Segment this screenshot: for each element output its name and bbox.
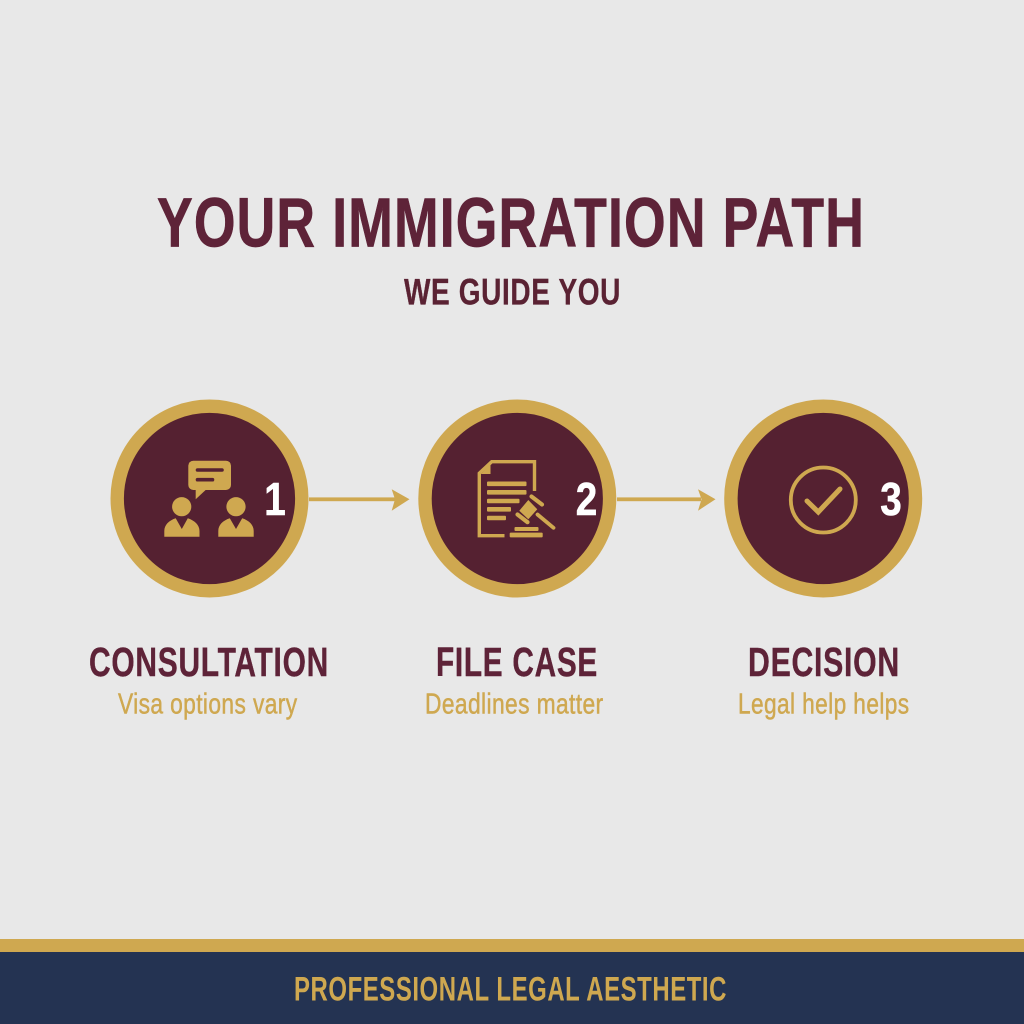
badge circle: step 3 <box>731 406 916 591</box>
heading: decision: DECISION <box>748 639 900 685</box>
step 1 label <box>89 639 329 720</box>
icon: document and gavel <box>479 462 554 537</box>
step 2 label <box>425 639 604 720</box>
arrow: step 1 to step 2 <box>309 489 410 511</box>
number 1: 1 <box>264 474 286 525</box>
caption: deadlines matter: Deadlines matter <box>425 688 604 720</box>
step 3 label <box>738 639 910 720</box>
number 2: 2 <box>576 474 597 525</box>
badge circle: step 1 <box>117 406 302 591</box>
number 3: 3 <box>880 474 902 525</box>
step 3 badge <box>731 406 916 591</box>
badge circle: step 2 <box>425 406 610 591</box>
subtitle: WE GUIDE YOU <box>404 271 621 312</box>
icon: check mark in circle <box>791 468 856 532</box>
step 1 badge <box>117 406 302 591</box>
heading: consultation: CONSULTATION <box>89 639 329 685</box>
icon: two people in conversation <box>164 461 254 537</box>
footer text: PROFESSIONAL LEGAL AESTHETIC <box>294 971 727 1009</box>
footer banner <box>0 939 1024 1024</box>
step 2 badge <box>425 406 610 591</box>
caption: legal help helps: Legal help helps <box>738 688 910 720</box>
caption: visa options vary: Visa options vary <box>118 688 298 720</box>
heading: file case: FILE CASE <box>436 639 598 685</box>
arrow: step 2 to step 3 <box>617 489 716 511</box>
